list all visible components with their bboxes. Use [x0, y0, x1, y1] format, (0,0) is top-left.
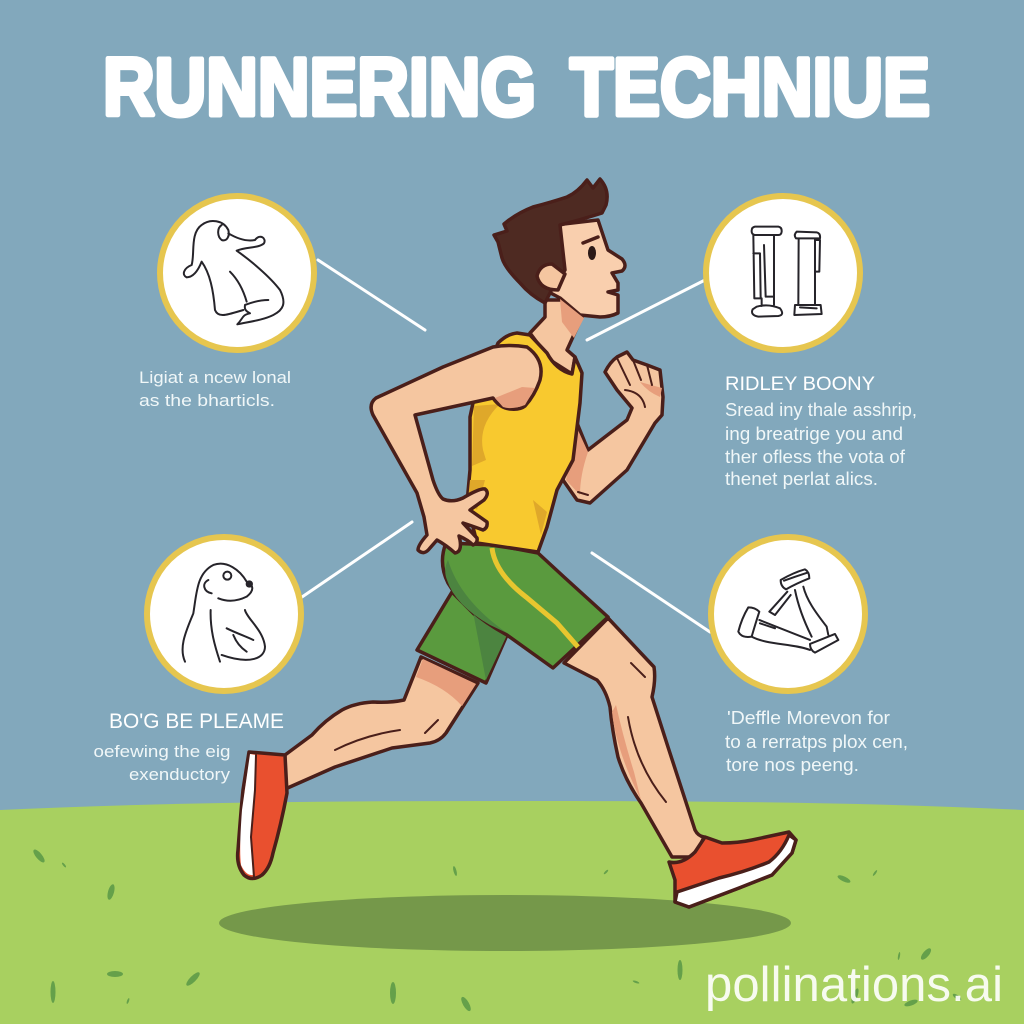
title: TECHNIUE	[570, 42, 930, 133]
fingers	[578, 358, 652, 495]
text block: top left caption: as the bharticls.	[139, 391, 275, 410]
front leg	[564, 618, 704, 857]
face	[535, 220, 625, 317]
front shoe	[669, 832, 796, 907]
grass ground	[0, 801, 1024, 1024]
panel: top left rabbit icon	[160, 196, 314, 350]
rear shoe	[238, 752, 287, 878]
text block: bottom right caption: tore nos peeng.	[726, 755, 859, 775]
rear arm and hand	[371, 346, 541, 553]
title	[103, 42, 930, 133]
text block: top left caption	[139, 368, 291, 410]
grass leaves	[32, 848, 962, 1012]
connector line: top right	[587, 280, 705, 340]
text block: bottom left caption	[94, 710, 284, 784]
text block: top right caption: ther ofless the vota of	[725, 447, 906, 467]
panel: top right columns icon	[706, 196, 860, 350]
runner figure	[238, 179, 796, 907]
text block: bottom right caption	[725, 708, 908, 775]
caption heading: RIDLEY BOONY	[725, 373, 875, 395]
text block: bottom left caption: exenductory	[129, 765, 231, 784]
text block: top left caption: Ligiat a ncew lonal	[139, 368, 291, 387]
connector line: bottom right	[592, 553, 710, 632]
watermark: pollinations.ai	[705, 958, 1003, 1012]
connector line: top left	[318, 260, 425, 330]
rear leg	[283, 657, 478, 790]
singlet	[467, 333, 582, 552]
connector line: bottom left	[302, 522, 412, 597]
text block: bottom right caption: to a rerratps plox cen,	[725, 732, 908, 752]
title: RUNNERING	[103, 42, 536, 133]
eye	[588, 246, 596, 260]
eyebrow	[583, 237, 598, 243]
caption heading: BO'G BE PLEAME	[109, 710, 284, 733]
head	[494, 179, 625, 338]
shorts stripe	[492, 548, 578, 647]
text block: top right caption	[725, 373, 917, 489]
shorts	[417, 543, 608, 683]
text block: top right caption: thenet perlat alics.	[725, 469, 878, 489]
panel: bottom left seal icon	[147, 537, 301, 691]
hair	[494, 179, 607, 303]
text block: bottom right caption: 'Deffle Morevon for	[727, 708, 890, 728]
text block: bottom left caption: oefewing the eig	[94, 742, 230, 761]
ground shadow	[219, 895, 791, 951]
text block: top right caption: Sread iny thale asshrip,	[725, 400, 917, 420]
text block: top right caption: ing breatrige you and	[725, 424, 903, 444]
ear	[537, 264, 565, 290]
front arm	[563, 352, 663, 503]
neck	[530, 300, 582, 374]
panel: bottom right dumbbell icon	[711, 537, 865, 691]
